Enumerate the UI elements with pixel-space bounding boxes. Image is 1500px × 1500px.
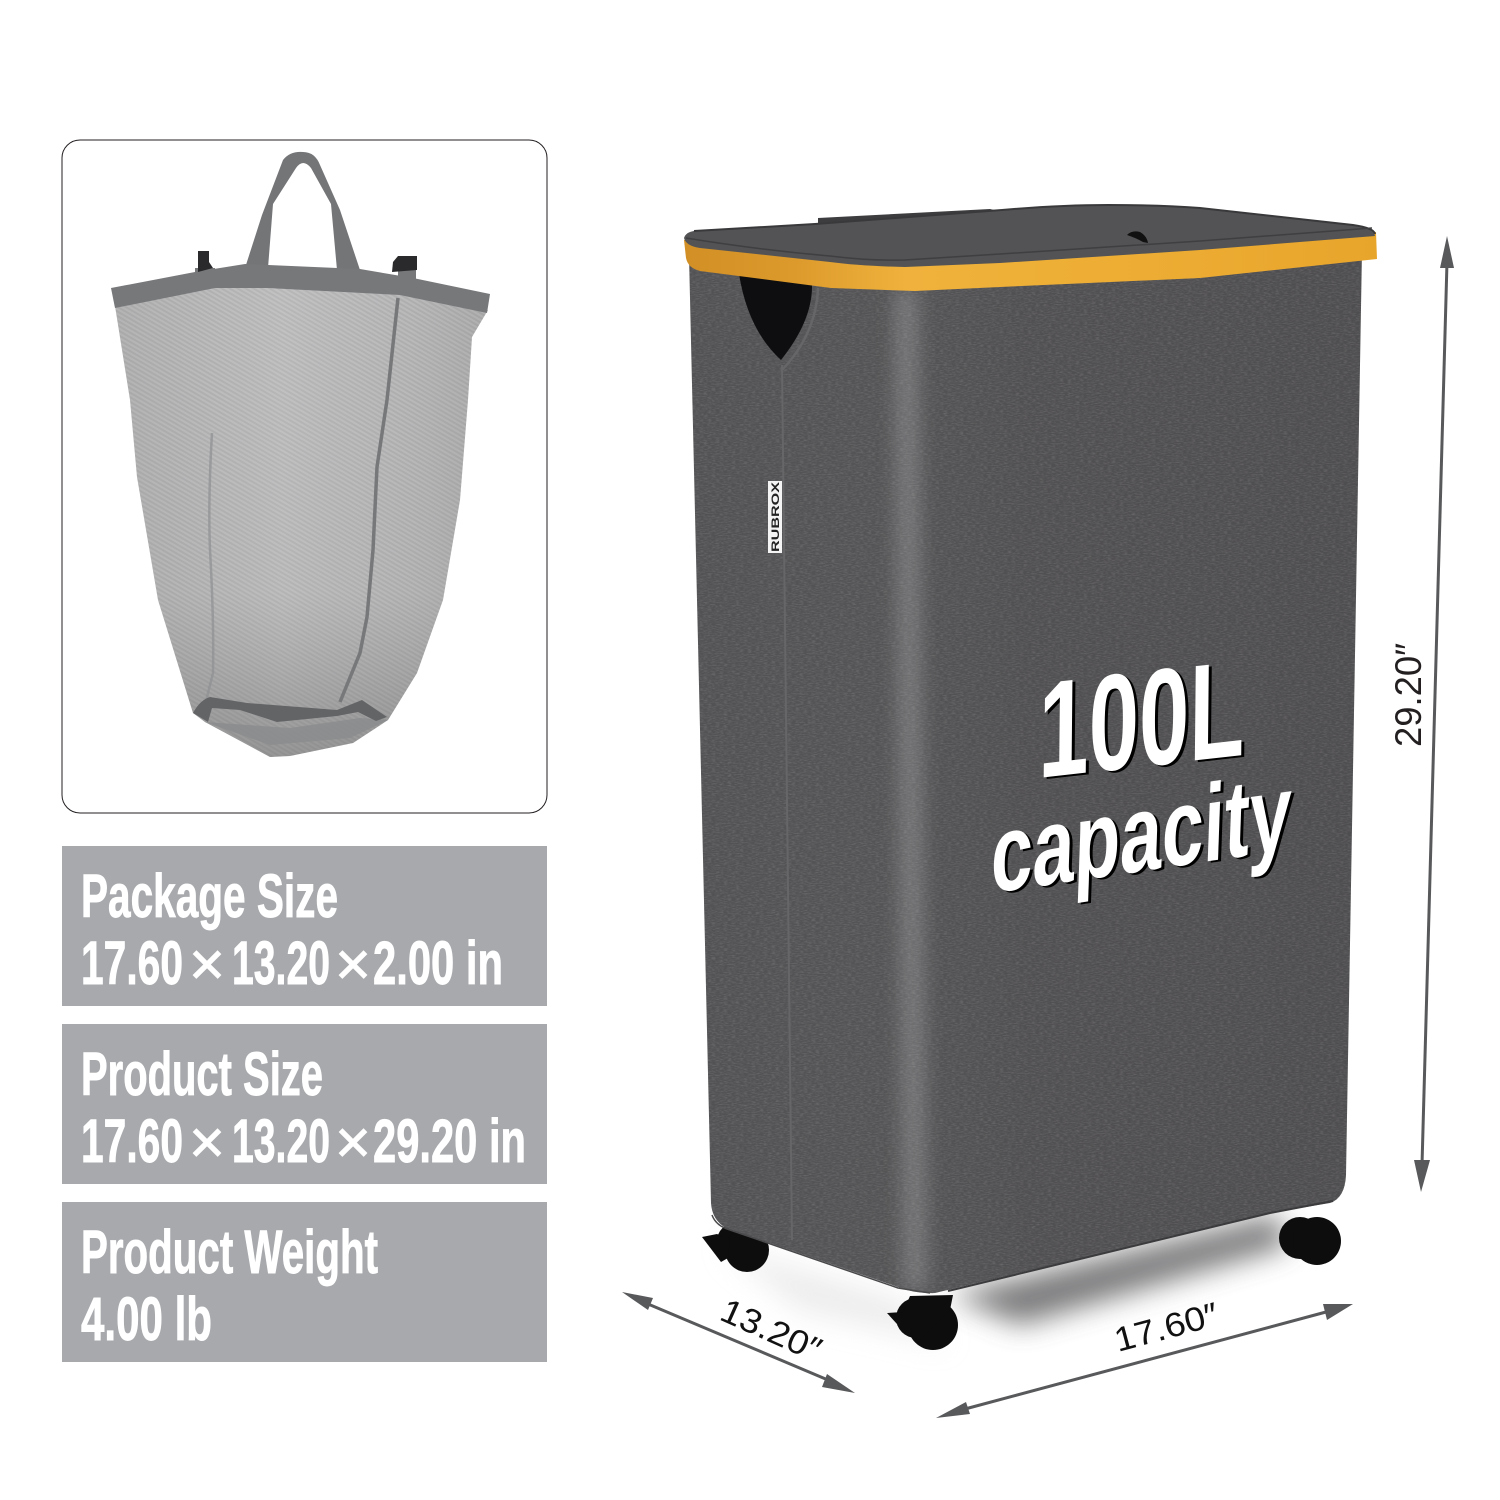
icon: bag handle xyxy=(245,152,360,270)
panel: product size xyxy=(62,1024,547,1184)
text: capacity headline: 100L xyxy=(1038,632,1245,808)
text: product size: × xyxy=(335,1108,371,1176)
panel: product weight xyxy=(62,1202,547,1362)
text: capacity headline: 100L xyxy=(1041,634,1248,810)
text: capacity headline xyxy=(989,632,1296,918)
icon: rubrox label: RUBROX xyxy=(770,481,782,552)
text: package size: 17.60 xyxy=(81,929,183,997)
text: depth label: 13.20″ xyxy=(715,1292,827,1369)
text: product size: 17.60 xyxy=(81,1107,183,1175)
text: product size: 29.20 in xyxy=(373,1107,526,1175)
text: product size: Product Size xyxy=(81,1040,323,1108)
panel: package size xyxy=(62,846,547,1006)
icon: mesh body xyxy=(115,286,488,757)
icon: bag buckles xyxy=(195,251,417,292)
icon: lid pull loop xyxy=(1127,231,1148,243)
text: product weight: Product Weight xyxy=(81,1218,378,1286)
icon: hamper xyxy=(684,205,1377,1350)
icon: rubrox label xyxy=(768,481,782,553)
text: product weight: 4.00 lb xyxy=(81,1285,212,1353)
lid xyxy=(684,205,1375,267)
icon: casters xyxy=(702,1217,1341,1350)
icon: side handle cutout xyxy=(739,274,818,371)
arrow: depth xyxy=(622,1292,855,1393)
text: width label: 17.60″ xyxy=(1110,1296,1222,1360)
panel: mesh bag xyxy=(62,140,547,813)
text: product size: × xyxy=(189,1108,225,1176)
text: package size: 2.00 in xyxy=(373,929,503,997)
arrow: height xyxy=(1414,236,1454,1192)
bamboo rim xyxy=(684,232,1377,291)
icon: bag rim xyxy=(111,264,490,313)
text: package size: 13.20 xyxy=(232,929,330,997)
hamper body xyxy=(689,250,1362,1293)
text: package size: × xyxy=(335,930,371,998)
text: package size: Package Size xyxy=(81,862,338,930)
text: height label: 29.20″ xyxy=(1388,643,1429,747)
text: product size: 13.20 xyxy=(232,1107,330,1175)
arrow: width xyxy=(936,1304,1353,1418)
text: package size: × xyxy=(189,930,225,998)
text: capacity headline: capacity xyxy=(992,752,1296,918)
text: capacity headline: capacity xyxy=(989,751,1293,917)
